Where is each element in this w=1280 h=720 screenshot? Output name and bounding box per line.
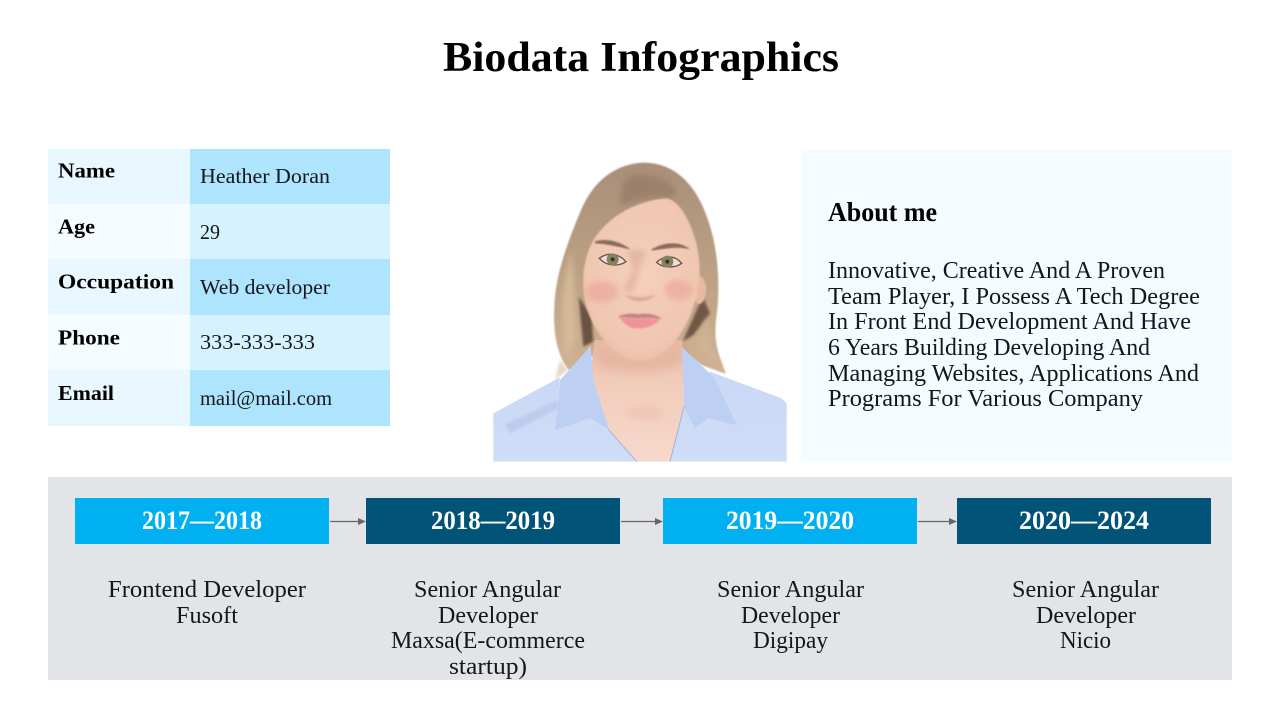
neck shadow <box>597 343 680 371</box>
row: occupation: Web developer <box>200 275 330 299</box>
role: Fusoft: Frontend Developer <box>108 577 306 603</box>
role: Maxsa <box>391 577 585 680</box>
title: Biodata Infographics <box>443 35 839 81</box>
role: Nicio: Senior Angular <box>1012 577 1159 603</box>
row: phone: 333-333-333 <box>200 330 315 354</box>
dark hair shade left of neck <box>579 297 593 347</box>
role: Fusoft: Fusoft <box>176 603 238 629</box>
ear <box>693 276 706 304</box>
year box: 2017-2018: 2017—2018 <box>142 505 262 535</box>
row: name: Name <box>58 158 115 182</box>
row: phone <box>48 315 390 370</box>
year box: 2019-2020: 2019—2020 <box>726 505 854 535</box>
about text: Team Player, I Possess A Tech Degree <box>828 284 1200 310</box>
row: phone: Phone <box>58 326 120 350</box>
row: email: mail@mail.com <box>200 386 332 410</box>
shirt left <box>493 377 637 462</box>
row: age <box>48 204 390 260</box>
about text: Managing Websites, Applications And <box>828 361 1199 387</box>
row: occupation: Occupation <box>58 270 174 294</box>
role: Digipay: Developer <box>741 603 840 629</box>
right cheek <box>664 280 692 300</box>
role: Digipay <box>717 577 864 654</box>
faint hair wisp left <box>555 360 567 380</box>
row: occupation <box>48 259 390 315</box>
nose tip <box>625 294 655 301</box>
hair highlight right <box>697 317 720 370</box>
role: Nicio: Developer <box>1036 603 1136 629</box>
year box: 2019-2020 <box>663 498 917 544</box>
role: Digipay: Senior Angular <box>717 577 864 603</box>
role: Fusoft <box>108 577 306 629</box>
arrow <box>918 518 957 525</box>
role: Maxsa: Developer <box>438 603 538 629</box>
portrait photo <box>493 163 787 462</box>
role: Maxsa: startup) <box>449 654 527 680</box>
row: email <box>48 370 390 426</box>
year box: 2020-2024: 2020—2024 <box>1019 505 1149 535</box>
eyebrow right <box>652 243 690 251</box>
eyebrow left <box>595 240 631 249</box>
role: Nicio: Nicio <box>1060 628 1111 654</box>
about text: Innovative, Creative And A Proven <box>828 258 1165 284</box>
role: Maxsa: Senior Angular <box>414 577 561 603</box>
panel: career timeline <box>48 477 1232 680</box>
right eye <box>657 256 682 268</box>
hair back <box>554 163 726 374</box>
year box: 2018-2019 <box>366 498 620 544</box>
row: age: 29 <box>200 220 220 244</box>
right collar <box>682 347 737 428</box>
eye socket shade <box>623 250 647 293</box>
face <box>583 198 700 361</box>
row: name <box>48 149 390 204</box>
heading: about me: About me <box>828 197 937 227</box>
role: Digipay: Digipay <box>753 628 828 654</box>
arrow <box>330 518 366 525</box>
about text <box>828 258 1200 412</box>
arrow <box>621 518 663 525</box>
role: Maxsa: Maxsa(E-commerce <box>391 628 585 654</box>
row: age: Age <box>58 214 95 238</box>
left cheek <box>585 281 618 302</box>
left collar <box>555 346 609 431</box>
about text: Programs For Various Company <box>828 386 1143 412</box>
about text: 6 Years Building Developing And <box>828 335 1150 361</box>
placket edge <box>608 407 684 462</box>
left eye <box>599 253 626 265</box>
table: personal details <box>48 149 390 426</box>
lips <box>617 314 662 329</box>
panel: about me <box>801 149 1232 461</box>
year box: 2017-2018 <box>75 498 329 544</box>
dark hair shade right of neck <box>683 297 710 342</box>
neck <box>592 340 684 462</box>
chest highlight <box>625 406 665 421</box>
row: name: Heather Doran <box>200 164 330 188</box>
row: email: Email <box>58 381 114 405</box>
shirt shade <box>505 400 558 433</box>
hair highlight left <box>563 250 576 360</box>
year box: 2020-2024 <box>957 498 1211 544</box>
year box: 2018-2019: 2018—2019 <box>431 505 555 535</box>
role: Nicio <box>1012 577 1159 654</box>
shirt right <box>670 372 787 462</box>
about text: In Front End Development And Have <box>828 309 1191 335</box>
darker crown <box>620 174 677 207</box>
